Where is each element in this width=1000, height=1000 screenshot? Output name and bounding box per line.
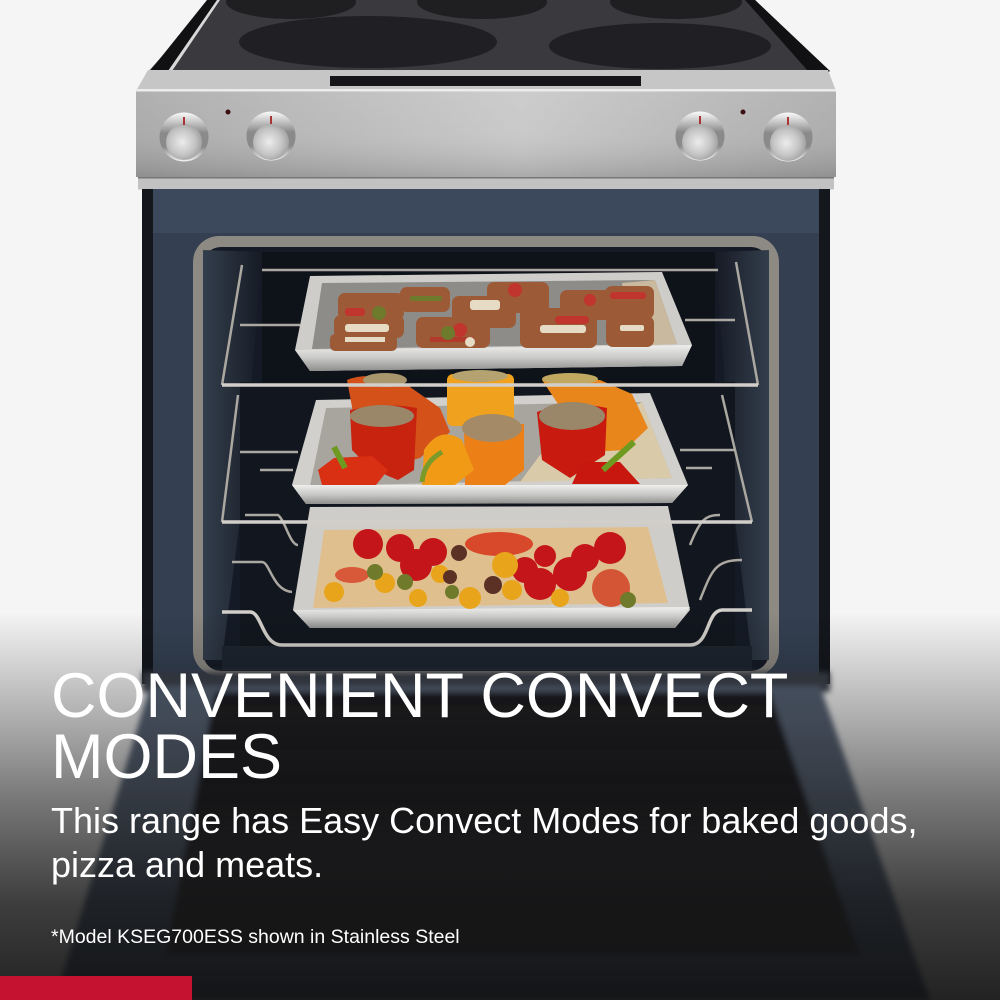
tray top <box>295 272 692 371</box>
tray bottom <box>293 506 690 628</box>
title <box>51 661 788 792</box>
red accent bar <box>0 976 192 1000</box>
description <box>51 800 917 885</box>
title: MODES <box>51 722 282 792</box>
knob 2 <box>246 112 296 160</box>
open door <box>55 672 930 1000</box>
back racks <box>222 262 758 600</box>
knob 4 <box>764 112 812 162</box>
knob 1 <box>160 112 208 162</box>
description: pizza and meats. <box>51 844 323 885</box>
rack 1 front <box>222 383 758 387</box>
rack 2 and rack 3 front <box>222 522 752 645</box>
oven frame and cavity <box>142 189 830 684</box>
footnote: *Model KSEG700ESS shown in Stainless Steel <box>51 926 460 948</box>
tray middle <box>292 370 688 504</box>
title: CONVENIENT CONVECT <box>51 661 788 731</box>
bottom fade overlay <box>0 612 1000 1000</box>
cooktop <box>148 0 830 72</box>
control panel <box>136 70 836 190</box>
knob 3 <box>676 112 724 160</box>
description: This range has Easy Convect Modes for baked goods, <box>51 800 917 841</box>
